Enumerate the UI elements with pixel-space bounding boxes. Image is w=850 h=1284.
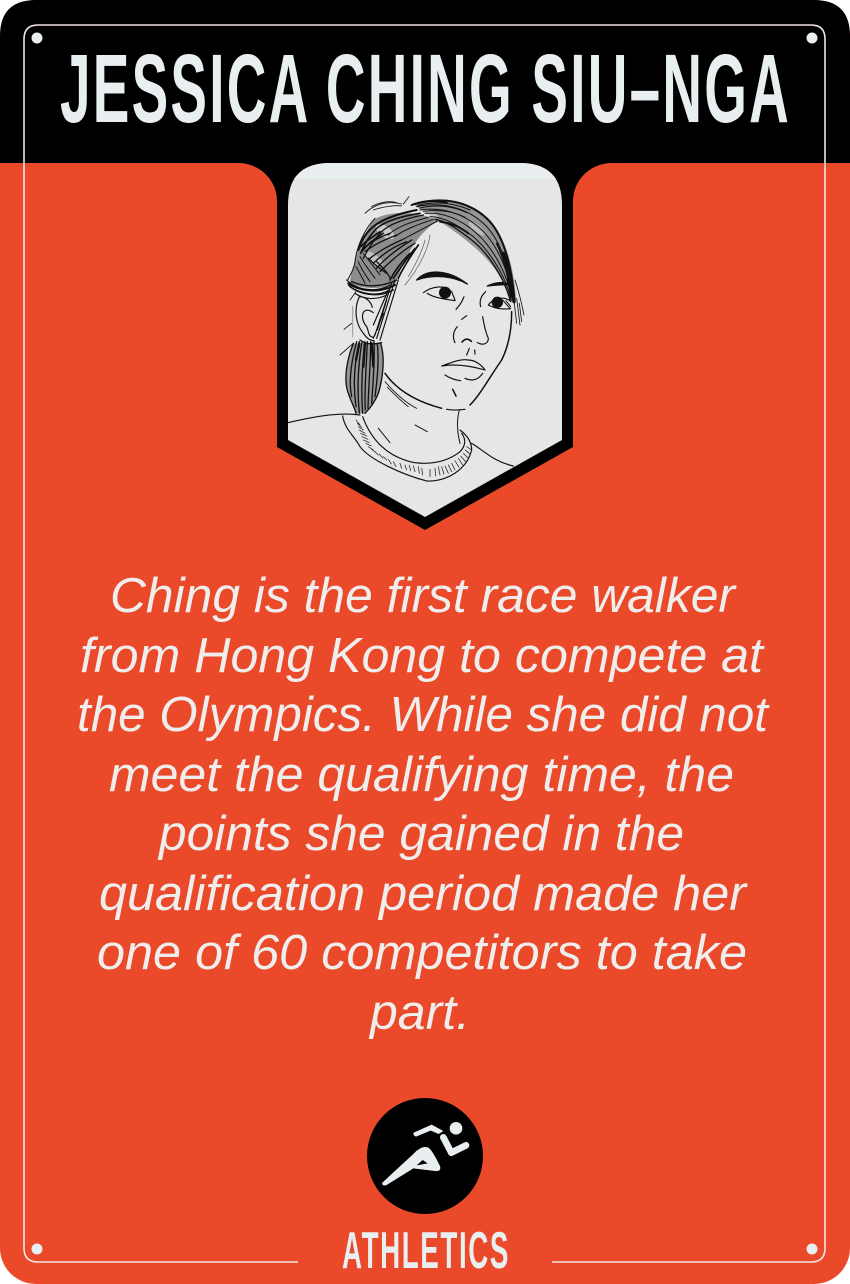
body text: from Hong Kong to compete at [80,629,765,683]
side hair strands [373,280,398,340]
portrait illustration [288,197,524,481]
hair tone fills [349,213,438,288]
panel: black header band with shield notch [0,0,850,530]
body text: qualification period made her [99,867,748,921]
right eyebrow [487,283,512,286]
jaw and chin [385,312,512,408]
right eye [480,292,511,309]
body text: part. [368,986,470,1040]
hair highlights [373,221,397,242]
body text: Ching is the first race walker [110,569,737,623]
body text [77,569,770,1040]
icon: athletics runner [367,1098,483,1214]
shield top highlight [294,163,556,179]
ear [356,297,374,341]
hair wisps at right temple [513,280,524,325]
body text: the Olympics. While she did not [77,688,770,742]
hair right section [412,200,514,302]
portrait shield [288,163,562,517]
left eyebrow [417,272,467,284]
lips [442,360,485,381]
ponytail [346,340,383,413]
left eye [423,287,455,301]
hair [348,197,516,302]
face features [340,280,524,413]
shield background [288,163,562,517]
body text: one of 60 competitors to take [97,926,747,980]
sport label: ATHLETICS [342,1222,510,1280]
neck, shoulders and collar [288,409,513,481]
body text: points she gained in the [157,807,684,861]
hair left section [348,197,438,295]
body text: meet the qualifying time, the [109,748,734,802]
nose [453,297,488,355]
